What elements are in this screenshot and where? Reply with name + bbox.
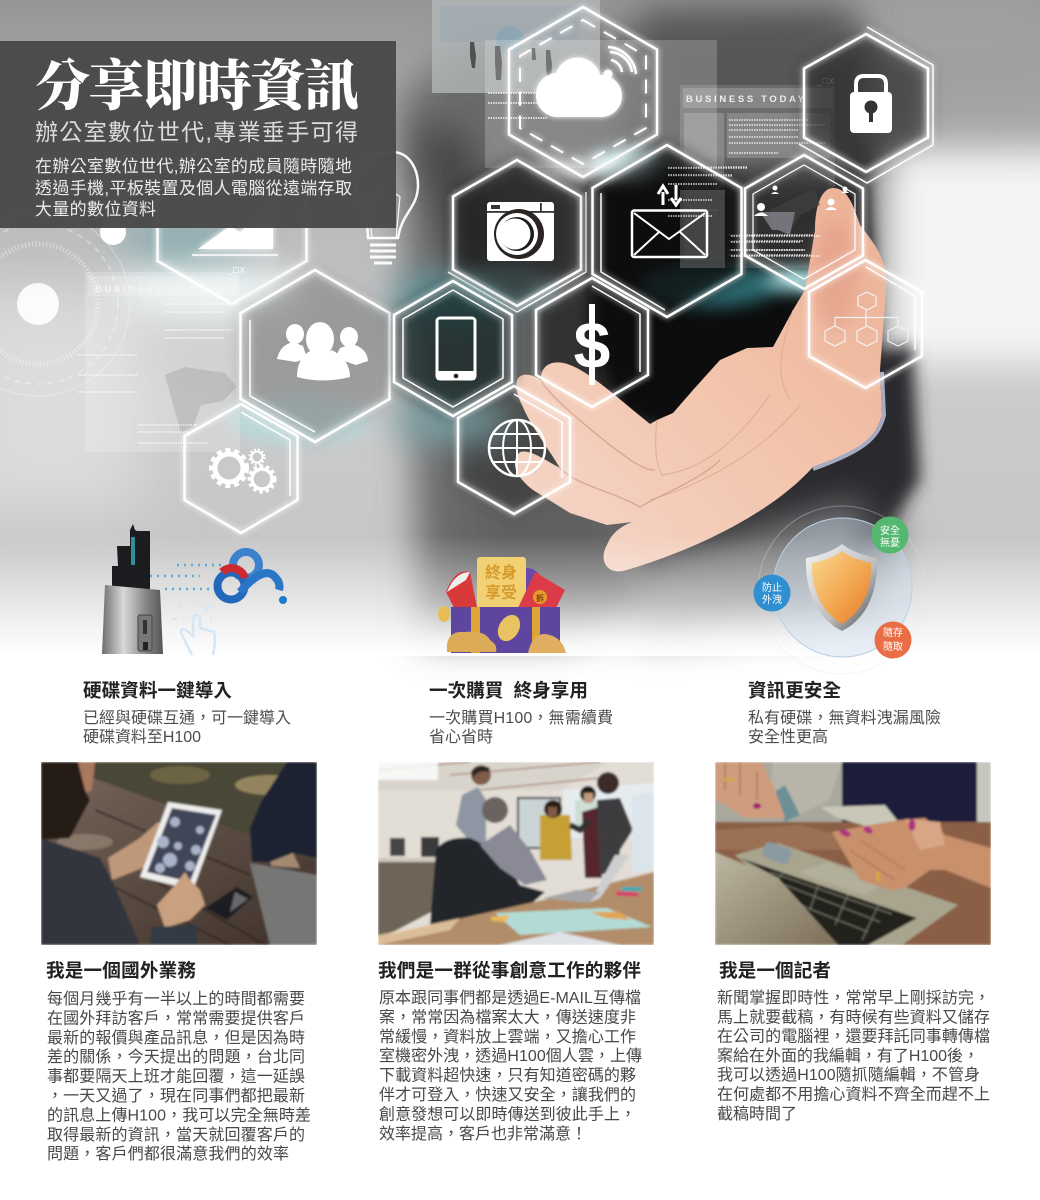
feature: one-click import: 硬碟資料至H100	[83, 728, 201, 746]
column: journalist: 馬上就要截稿，有時候有些資料又儲存	[717, 1008, 990, 1026]
hexagon: dollar	[536, 278, 648, 407]
badge: access anywhere: 隨存	[883, 626, 903, 639]
feature: data security: 安全性更高	[748, 728, 828, 746]
hand	[515, 188, 886, 571]
lifetime card: 終身	[485, 563, 517, 582]
column: journalist: 我可以透過H100隨抓隨編輯，不管身	[717, 1065, 980, 1084]
column: foreign sales: 事都要隔天上班才能回覆，這一延誤	[47, 1067, 305, 1086]
column: creative team: 下載資料超快速，只有知道密碼的夥	[379, 1067, 636, 1085]
data text strip	[668, 168, 821, 256]
column: journalist: 我是一個記者	[719, 960, 831, 981]
icon: cloud with wifi	[536, 47, 636, 117]
column: creative team: 室機密外洩，透過H100個人雲，上傳	[379, 1047, 642, 1065]
column: foreign sales: ，一天又過了，現在同事們都把最新	[47, 1087, 305, 1105]
column: journalist: 案給在外面的我編輯，有了H100後，	[717, 1047, 979, 1065]
lightbulb icon	[355, 152, 418, 263]
column: foreign sales: 每個月幾乎有一半以上的時間都需要	[47, 990, 305, 1008]
illustration: gift box	[438, 557, 566, 653]
hexagon: org chart	[809, 260, 922, 388]
column: creative team	[378, 960, 642, 1143]
icon: tap hand	[172, 601, 215, 655]
column: foreign sales: 在國外拜訪客戶，常常需要提供客戶	[47, 1009, 305, 1027]
column: foreign sales: 取得最新的資訊，當天就回覆客戶的	[47, 1126, 305, 1144]
hexagon: gears	[184, 404, 298, 533]
lifetime card: 享受	[485, 583, 517, 602]
icon: padlock	[850, 76, 892, 133]
icon: hierarchy	[825, 292, 908, 346]
column: journalist: 截稿時間了	[717, 1105, 797, 1123]
banner subtitle: 辦公室數位世代,專業垂手可得	[35, 119, 358, 145]
feature: data security: 資訊更安全	[748, 680, 841, 701]
column: journalist: 新聞掌握即時性，常常早上剛採訪完，	[717, 989, 990, 1007]
column: foreign sales: 我是一個國外業務	[46, 960, 196, 981]
hexagon: cloud	[509, 7, 657, 177]
column: creative team: 案，常常因為檔案太大，傳送速度非	[379, 1008, 636, 1026]
feature: one-click import	[83, 680, 291, 746]
badge: leak prevention	[754, 574, 790, 612]
column: foreign sales: 最新的報價與產品訊息，但是因為時	[47, 1029, 305, 1047]
hexagon: tablet	[394, 281, 512, 416]
banner	[0, 41, 396, 228]
icon: chart	[192, 205, 278, 255]
column: foreign sales: 差的關係，今天提出的問題，台北同	[47, 1047, 305, 1066]
illustration: hard drive import	[102, 524, 287, 655]
floating photo panel	[432, 0, 600, 93]
icon: people	[277, 322, 368, 380]
icons: user pins	[754, 186, 849, 216]
icon: tablet	[437, 318, 475, 380]
banner description: 大量的數位資料	[35, 200, 156, 219]
column: foreign sales	[46, 960, 311, 1163]
illustration: security shield	[754, 506, 926, 674]
hexagon: people	[240, 270, 390, 442]
badge: leak prevention: 外洩	[762, 593, 782, 606]
feature: data security	[748, 680, 941, 746]
icon: gears	[211, 450, 275, 492]
feature: one-time purchase: 省心省時	[429, 728, 493, 746]
column: foreign sales: 問題，客戶們都很滿意我們的效率	[47, 1144, 289, 1163]
column: journalist: 在何處都不用擔心資料不齊全而趕不上	[717, 1086, 990, 1104]
feature: one-click import: 已經與硬碟互通，可一鍵導入	[83, 708, 291, 727]
badge: safe: 無憂	[880, 536, 900, 549]
hexagon: world map	[745, 155, 863, 289]
bottom fade to white	[0, 535, 1040, 656]
photo: tablet at outdoor table	[41, 762, 317, 945]
icon: cloud logo	[218, 552, 287, 604]
column: creative team: 原本跟同事們都是透過E-MAIL互傳檔	[379, 989, 641, 1007]
icon: camera	[487, 202, 554, 261]
column: creative team: 效率提高，客戶也非常滿意！	[379, 1124, 587, 1143]
badge: safe	[872, 516, 908, 554]
teal light glows	[115, 149, 845, 445]
banner description: 在辦公室數位世代,辦公室的成員隨時隨地	[35, 157, 352, 176]
column: foreign sales: 的訊息上傳H100，我可以完全無時差	[47, 1106, 311, 1124]
lifetime card	[477, 557, 526, 612]
panel: business today left: _☐X	[227, 266, 246, 275]
banner description	[35, 157, 352, 219]
suit dark mass	[400, 10, 920, 640]
hexagon: globe	[458, 386, 570, 514]
badge: access anywhere: 隨取	[883, 640, 903, 653]
column: creative team: 我們是一群從事創意工作的夥伴	[378, 960, 641, 981]
hexagon: chart	[158, 132, 306, 304]
column: creative team: 常緩慢，資料放上雲端，又擔心工作	[379, 1027, 636, 1046]
photo: creative team in office	[378, 762, 654, 945]
feature: one-time purchase: 一次購買 終身享用	[429, 680, 588, 701]
left data rings	[0, 212, 130, 396]
column: creative team: 創意發想可以即時傳送到彼此手上，	[379, 1104, 636, 1123]
panel: business today left	[78, 266, 246, 452]
translucent data panel top	[485, 40, 717, 168]
column: creative team: 伴才可登入，快速又安全，讓我們的	[379, 1085, 636, 1104]
feature: one-click import: 硬碟資料一鍵導入	[83, 680, 232, 701]
column: journalist	[717, 960, 990, 1123]
banner title: 分享即時資訊	[35, 56, 359, 117]
feature: data security: 私有硬碟，無資料洩漏風險	[748, 709, 941, 727]
photo: phone and laptop on desk	[715, 762, 991, 945]
panel: business today left: BUSINESS TODAY	[95, 284, 214, 295]
icon: dollar sign: $	[574, 308, 610, 382]
hero background photo	[0, 0, 1040, 656]
shield	[806, 544, 877, 631]
hexagon: envelope	[592, 145, 821, 317]
panel: business today right	[668, 77, 835, 268]
badge: access anywhere	[874, 622, 912, 658]
feature: one-time purchase: 一次購買H100，無需續費	[429, 709, 613, 727]
drive dock	[102, 524, 163, 654]
panel: business today right: BUSINESS TODAY	[686, 94, 805, 105]
badge: leak prevention: 防止	[762, 581, 782, 594]
icon: envelope with arrows	[632, 185, 707, 257]
badge: safe: 安全	[880, 524, 900, 537]
hexagon: lock	[799, 27, 933, 183]
feature: one-time purchase	[429, 680, 613, 746]
data dots	[150, 565, 225, 589]
icon: globe	[489, 420, 545, 476]
illustration: gift box: 拆	[536, 593, 544, 603]
panel: business today right: _☐X	[816, 77, 835, 86]
hexagon: camera	[448, 160, 586, 312]
banner description: 透過手機,平板裝置及個人電腦從遠端存取	[35, 179, 352, 198]
column: journalist: 在公司的電腦裡，還要拜託同事轉傳檔	[717, 1028, 990, 1046]
